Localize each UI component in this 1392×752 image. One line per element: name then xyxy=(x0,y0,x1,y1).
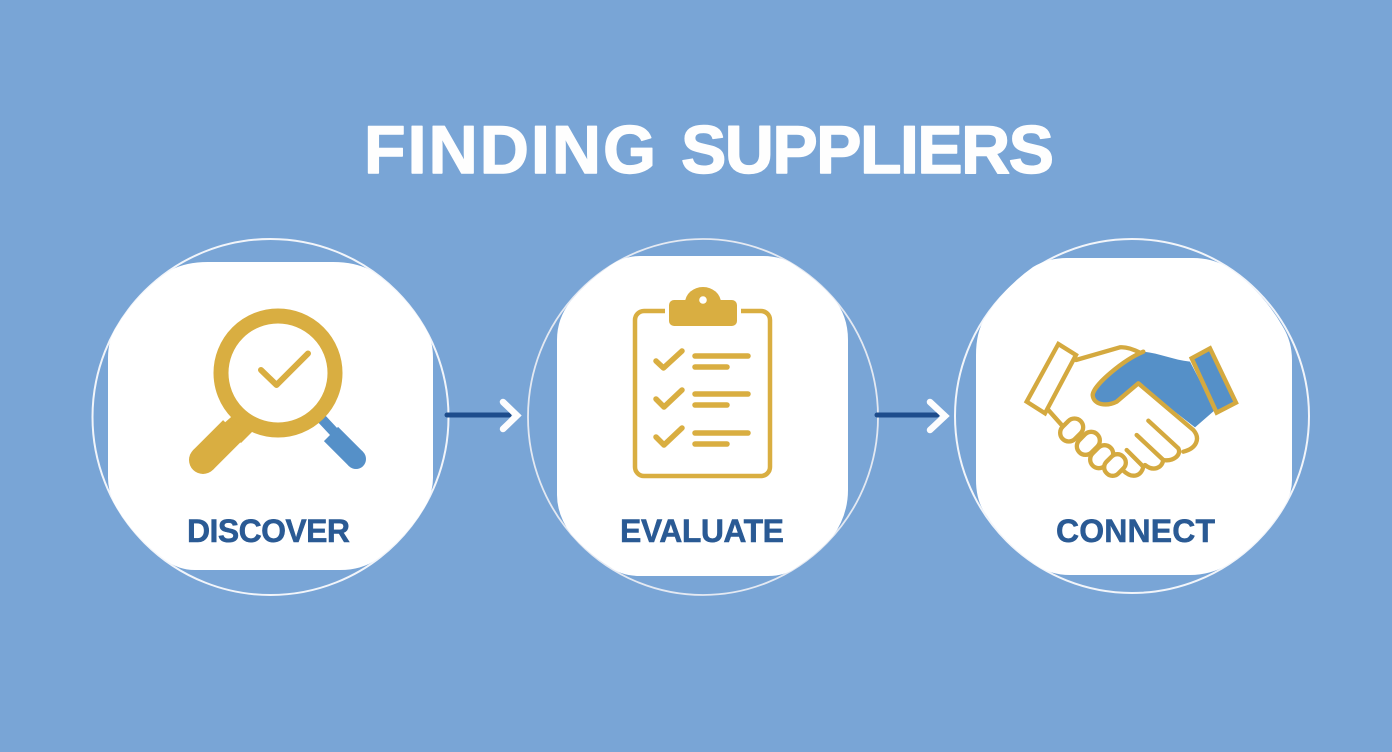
white card xyxy=(976,258,1292,575)
arrow: discover to evaluate xyxy=(447,402,517,429)
outline ellipse xyxy=(528,239,878,595)
panel: evaluate xyxy=(528,239,878,595)
label: discover: DISCOVER xyxy=(187,513,350,549)
icon: handshake xyxy=(1027,344,1236,479)
panel: discover xyxy=(92,239,448,595)
panel: connect xyxy=(955,239,1309,593)
outline circle xyxy=(955,239,1309,593)
white card xyxy=(557,256,848,576)
title: SUPPLIERS xyxy=(681,112,1054,188)
title: FINDING xyxy=(364,112,656,188)
label: connect: CONNECT xyxy=(1056,513,1215,549)
white card xyxy=(108,262,433,570)
icon: magnifying glass xyxy=(189,316,366,474)
arrow: evaluate to connect xyxy=(877,402,945,430)
label: evaluate: EVALUATE xyxy=(620,513,784,549)
icon: clipboard checklist xyxy=(635,287,770,476)
outline circle xyxy=(92,239,448,595)
